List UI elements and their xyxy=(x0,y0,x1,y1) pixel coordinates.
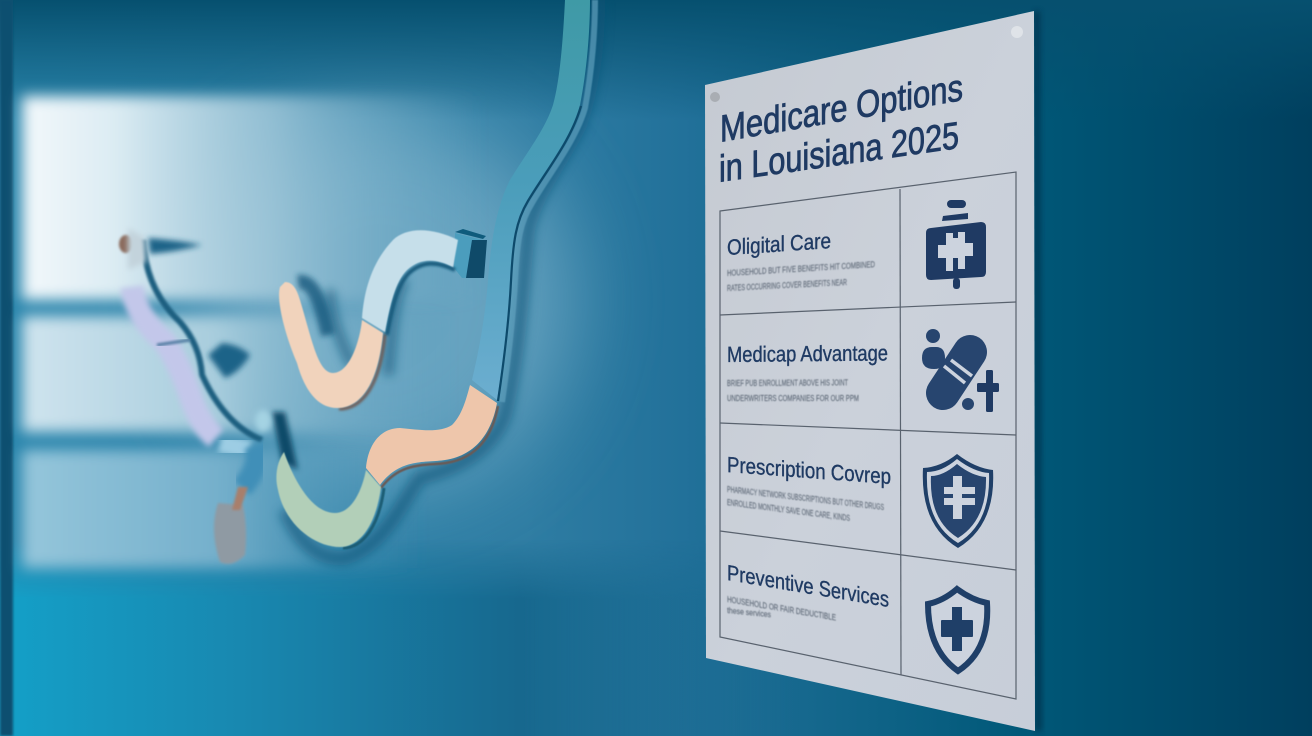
wavy wall art: main ribbon xyxy=(276,0,598,558)
row: Original Care: RATES OCCURRING COVER BENEFITS NEAR xyxy=(727,277,847,293)
row: Medicap Advantage: BRIEF PUB ENROLLMENT ABOVE HIS JOINT xyxy=(727,377,848,388)
grey bottom piece xyxy=(214,503,246,564)
poster shadow xyxy=(1034,11,1042,731)
row: Preventive Services xyxy=(727,560,987,671)
pale blue upper ribbon xyxy=(387,264,455,335)
row: Prescription Coverage: ENROLLED MONTHLY SAVE ONE CARE, KINDS xyxy=(727,497,850,523)
green ribbon segment xyxy=(343,488,384,548)
row: Prescription Coverage: Prescription Covrep xyxy=(727,452,891,489)
row: Medicap Advantage: Medicap Advantage xyxy=(727,340,888,367)
row: Preventive Services: Preventive Services xyxy=(727,560,889,612)
light side edge of the ribbon xyxy=(502,0,595,402)
icon: shield with double cross xyxy=(923,454,993,548)
screw: top right xyxy=(1011,26,1023,38)
icon: shield with plus xyxy=(928,589,987,671)
upper peach ribbon xyxy=(339,334,385,409)
row: Original Care xyxy=(727,200,986,293)
peach ribbon segment xyxy=(381,406,498,488)
row: Prescription Coverage: PHARMACY NETWORK SUBSCRIPTIONS BUT OTHER DRUGS xyxy=(727,484,884,512)
row: Medicap Advantage xyxy=(727,329,999,412)
shadow shapes xyxy=(148,238,250,378)
row: Preventive Services: these services xyxy=(727,605,771,619)
title: Medicare Options xyxy=(720,66,963,151)
panel: poster xyxy=(705,11,1035,731)
icon: medical case xyxy=(926,200,986,289)
row: Medicap Advantage: UNDERWRITERS COMPANIES FOR OUR PPM xyxy=(727,393,859,403)
ribbon drop shadows xyxy=(285,0,598,558)
teal connector block xyxy=(454,233,483,278)
lavender strand xyxy=(132,287,216,438)
table grid xyxy=(720,172,1016,699)
row: Original Care: Oligital Care xyxy=(727,228,831,260)
row: Preventive Services: HOUSEHOLD OR FAIR DEDUCTIBLE xyxy=(727,594,836,623)
pale blue link xyxy=(220,443,250,450)
title: in Louisiana 2025 xyxy=(719,114,959,191)
blurred window light reflections xyxy=(22,96,482,568)
blurred wavy wall art: distant strand xyxy=(119,228,298,564)
row: Original Care: HOUSEHOLD BUT FIVE BENEFITS HIT COMBINED xyxy=(727,259,875,278)
row: Prescription Coverage xyxy=(727,452,993,548)
title xyxy=(719,66,963,191)
blue ribbon segment xyxy=(472,0,590,400)
icon: bandage and person with plus xyxy=(922,329,999,412)
brown top knot xyxy=(119,235,133,253)
screw: top left xyxy=(710,92,720,102)
